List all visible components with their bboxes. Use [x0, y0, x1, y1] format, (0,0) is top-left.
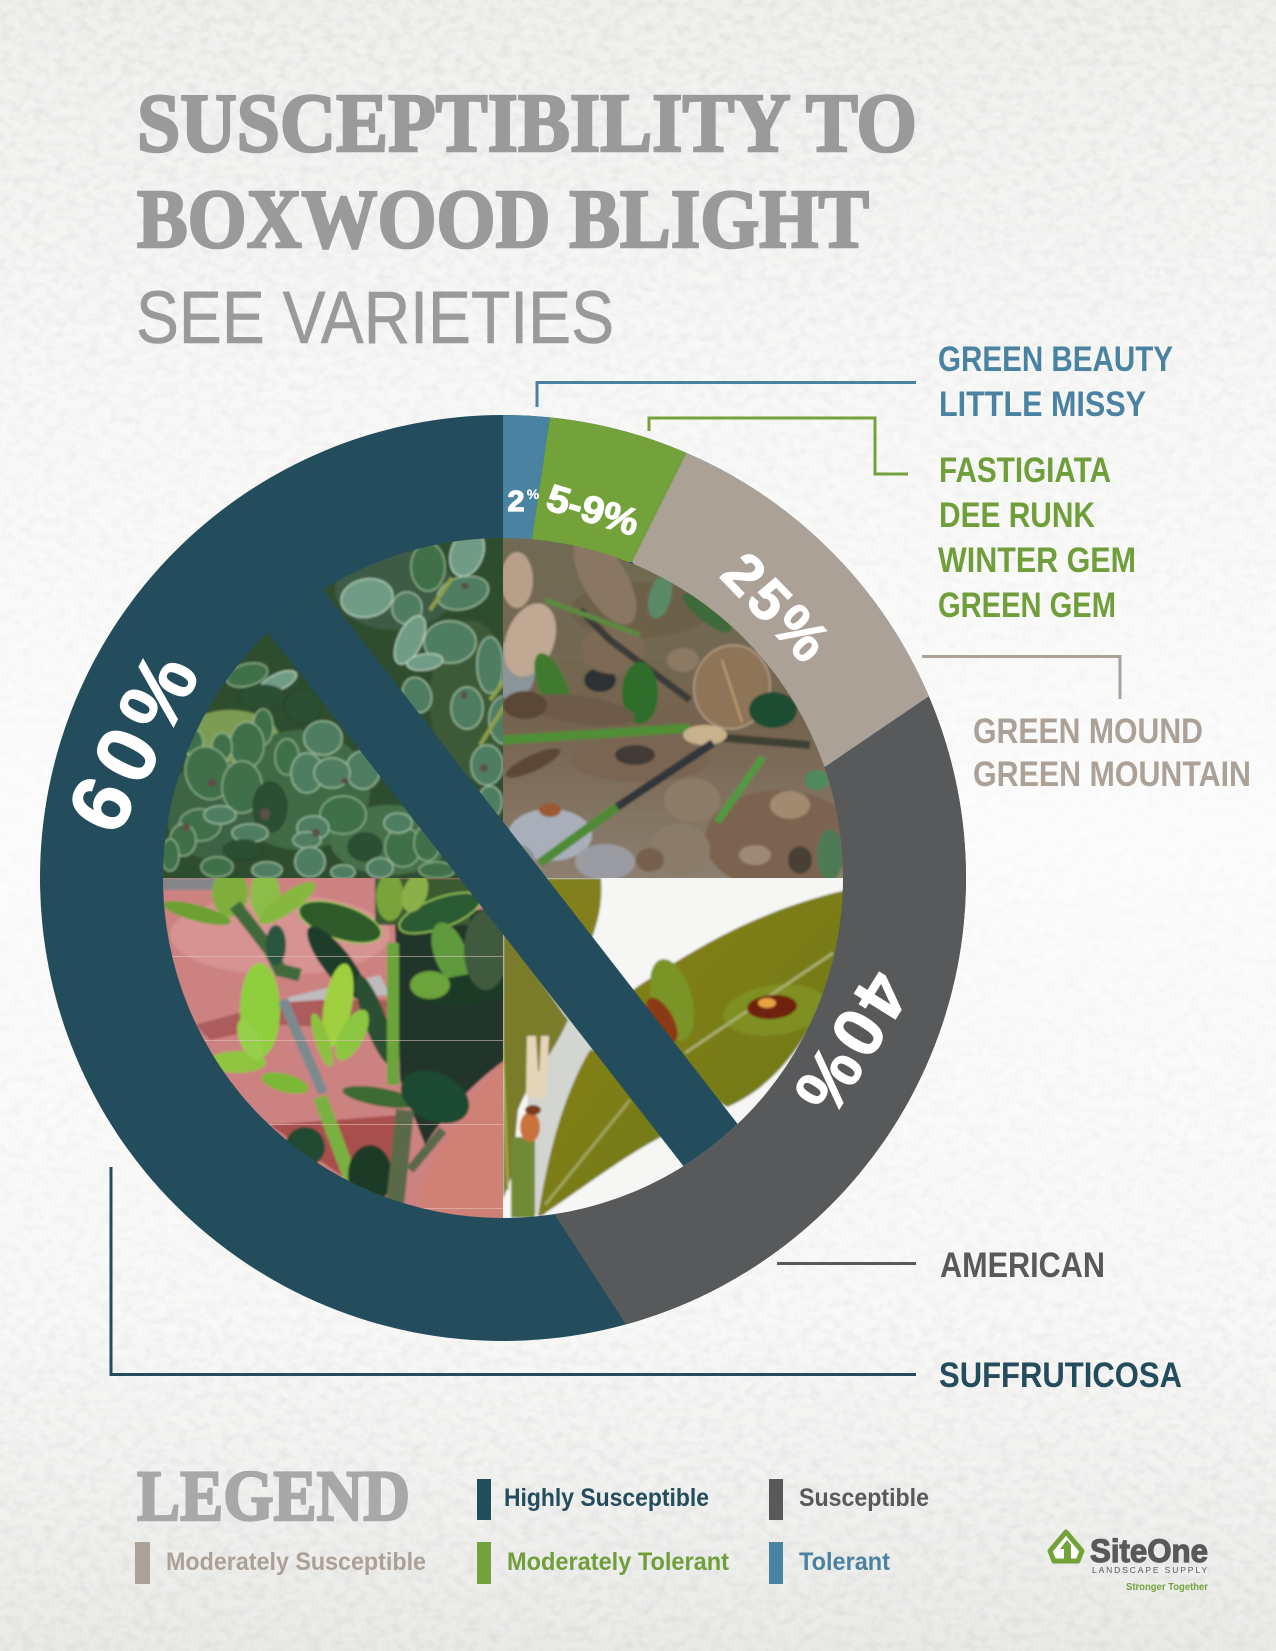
label: 25%: 25% — [709, 540, 842, 675]
photo: spotted boxwood leaves — [160, 525, 521, 880]
legend item: tolerant — [769, 1542, 891, 1584]
legend — [135, 1456, 929, 1584]
segment: susceptible 40% — [555, 696, 966, 1324]
legend item: moderately tolerant — [477, 1542, 730, 1584]
callout: tolerant varieties: GREEN BEAUTY — [938, 340, 1173, 379]
legend item: highly susceptible: Highly Susceptible — [504, 1484, 709, 1512]
label: 60%: 60% — [49, 638, 217, 847]
callout: moderately tolerant varieties: FASTIGIATA — [939, 451, 1111, 490]
segment: moderately susceptible 25% — [632, 453, 929, 767]
callout: moderately tolerant varieties: GREEN GEM — [938, 586, 1116, 625]
icon: arrow house — [1050, 1532, 1082, 1561]
title: SUSCEPTIBILITY TO — [137, 77, 917, 170]
photo: blighted green shoot held in hand — [160, 869, 515, 1221]
segment: highly susceptible 60% — [40, 415, 966, 1341]
legend item: highly susceptible — [477, 1479, 709, 1520]
callout: moderately tolerant varieties — [649, 418, 1136, 625]
logo: SiteOne: Stronger Together — [1126, 1582, 1208, 1593]
callout: susceptible variety: AMERICAN — [940, 1246, 1105, 1285]
donut chart — [40, 415, 966, 1341]
label: 40%: 40% — [779, 958, 925, 1127]
title — [136, 77, 917, 359]
callout: moderately susceptible varieties: GREEN MOUND — [973, 712, 1203, 751]
legend item: moderately susceptible: Moderately Susceptible — [166, 1548, 426, 1576]
title: SEE VARIETIES — [136, 276, 614, 359]
label: 2% symbol: % — [527, 486, 540, 502]
callout: moderately tolerant varieties: WINTER GEM — [938, 541, 1136, 580]
label: 2%: 2 — [508, 486, 524, 518]
callout: moderately tolerant varieties: DEE RUNK — [939, 496, 1095, 535]
logo: SiteOne: SiteOne — [1090, 1533, 1208, 1569]
title: BOXWOOD BLIGHT — [137, 173, 869, 266]
legend item: susceptible — [769, 1479, 929, 1520]
callout: highly susceptible variety — [111, 1167, 1182, 1395]
callout: tolerant varieties — [537, 340, 1173, 424]
segment: tolerant 2% — [503, 415, 550, 540]
callout: highly susceptible variety: SUFFRUTICOSA — [939, 1356, 1182, 1395]
photo: defoliated brown branches — [503, 538, 843, 878]
logo: SiteOne: LANDSCAPE SUPPLY — [1092, 1565, 1207, 1575]
label: 5-9%: 5-9% — [542, 477, 644, 545]
legend item: moderately susceptible — [135, 1542, 426, 1584]
photo: olive leaves with blight lesions — [500, 876, 846, 1221]
legend item: moderately tolerant: Moderately Tolerant — [507, 1548, 730, 1576]
legend item: susceptible: Susceptible — [799, 1484, 929, 1512]
legend heading: LEGEND — [137, 1456, 410, 1536]
prohibition bar — [268, 590, 738, 1166]
callout: moderately susceptible varieties — [922, 656, 1251, 794]
logo: SiteOne — [1050, 1532, 1208, 1593]
segment: moderately tolerant 5-9% — [532, 417, 686, 562]
callout: tolerant varieties: LITTLE MISSY — [939, 385, 1146, 424]
legend item: tolerant: Tolerant — [799, 1548, 891, 1576]
